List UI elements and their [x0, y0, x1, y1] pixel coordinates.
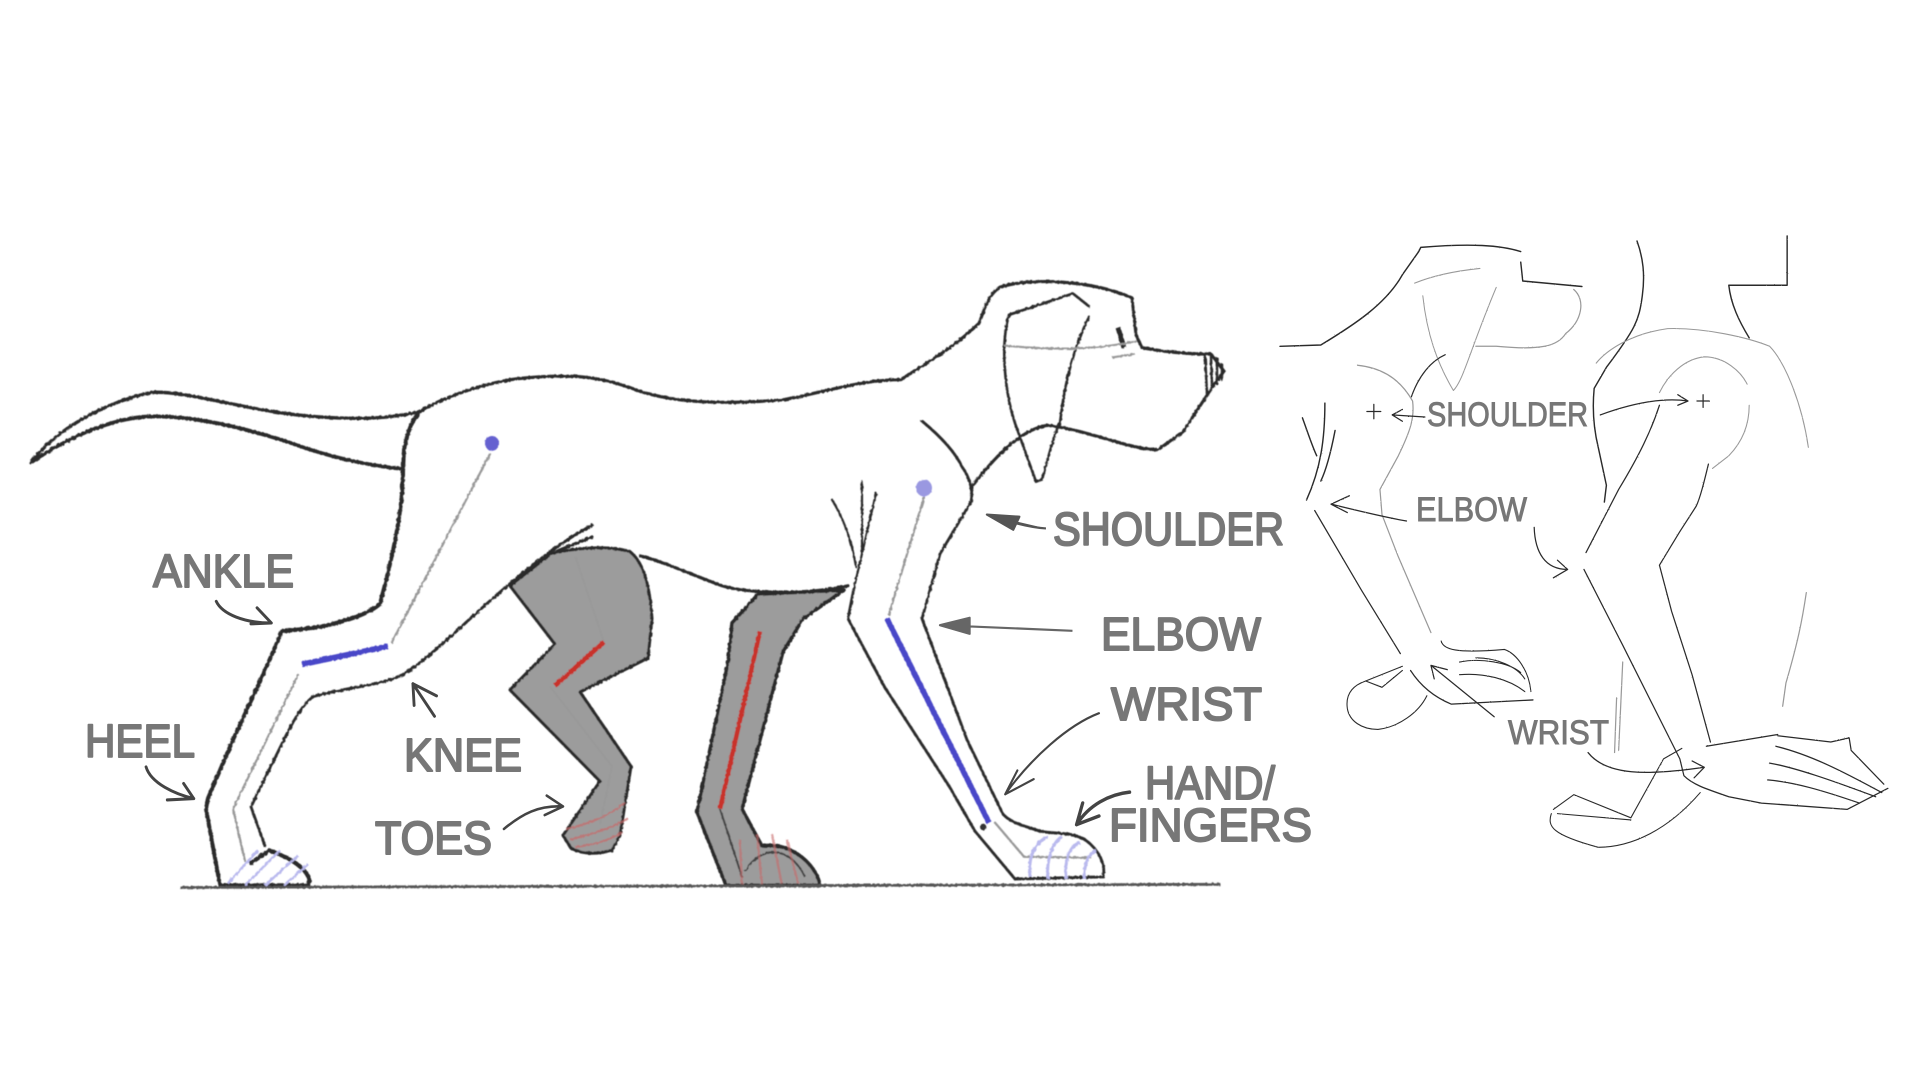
arrow: wrist — [1005, 713, 1099, 794]
arrow: wrist sketch — [1431, 665, 1494, 717]
arrow: toes — [504, 796, 563, 829]
arrow: shoulder sketch — [1367, 404, 1425, 421]
belly — [551, 537, 848, 592]
ground line — [180, 884, 1220, 888]
main dog drawing — [31, 282, 1224, 887]
label: wrist: WRIST — [1111, 678, 1262, 730]
label: ankle: ANKLE — [153, 545, 294, 597]
arrow: heel — [146, 767, 194, 800]
label: knee: KNEE — [404, 729, 522, 781]
label: fingers: FINGERS — [1109, 799, 1312, 851]
reference sketches — [1280, 236, 1888, 847]
far front leg — [697, 590, 844, 885]
label: toes: TOES — [375, 812, 492, 864]
eye and brow — [1005, 328, 1136, 357]
arrow: shoulder — [987, 515, 1046, 530]
label: shoulder: SHOULDER — [1053, 503, 1284, 555]
arrow: hand — [1077, 792, 1130, 825]
arrows right labels — [940, 515, 1130, 825]
arrow: elbow — [940, 618, 1072, 634]
sketch: dog front — [1280, 245, 1582, 729]
near hind leg — [206, 412, 592, 885]
body and head outline — [420, 282, 1224, 488]
ear — [1004, 294, 1089, 482]
arrow: ankle — [216, 601, 271, 624]
arrow: shoulder sketch right — [1600, 395, 1709, 415]
label: elbow: ELBOW — [1101, 608, 1262, 660]
arrow: knee — [413, 684, 437, 716]
label: hand: HAND/ — [1145, 757, 1275, 809]
near front leg — [832, 421, 1104, 879]
arrow: elbow sketch — [1331, 496, 1406, 521]
label: elbow sketch: ELBOW — [1416, 491, 1527, 529]
label: heel: HEEL — [85, 715, 195, 767]
label: shoulder sketch: SHOULDER — [1427, 396, 1588, 434]
nose — [1205, 354, 1222, 393]
tail — [31, 392, 420, 469]
arrow: elbow sketch right — [1534, 527, 1568, 578]
arrow: wrist sketch right — [1588, 753, 1704, 778]
arrows left labels — [146, 601, 563, 829]
label: wrist sketch: WRIST — [1508, 714, 1609, 752]
far hind leg — [510, 548, 652, 853]
sketch: front leg close-up — [1534, 236, 1888, 847]
